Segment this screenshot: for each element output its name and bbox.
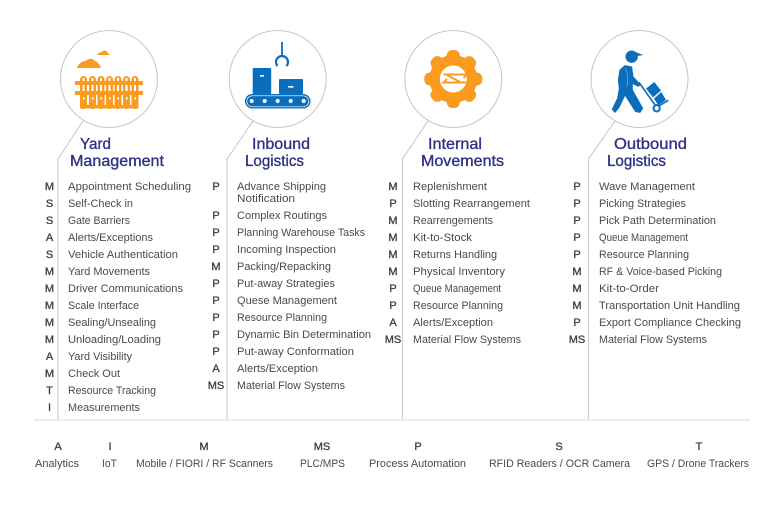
list: internal movements activities: Rearrengements: [413, 215, 493, 227]
legend: Analytics: [35, 458, 79, 470]
heading: inbound logistics: Inbound: [252, 136, 310, 153]
legend: M: [199, 441, 209, 453]
list: inbound logistics activities: Material Flow Systems: [237, 380, 345, 392]
list: internal movements activities: Queue Management: [413, 283, 501, 295]
list: inbound logistics activities: P: [212, 346, 220, 358]
legend: S: [555, 441, 563, 453]
list: inbound logistics activities: A: [212, 363, 220, 375]
list: outbound logistics activities: Transportation Unit Handling: [599, 300, 740, 312]
list: yard management activities: Resource Tracking: [68, 385, 156, 397]
list: yard management activities: M: [45, 283, 54, 295]
list: yard management activities: M: [45, 266, 54, 278]
heading: inbound logistics: Logistics: [245, 153, 304, 170]
list: internal movements activities: P: [389, 198, 397, 210]
list: outbound logistics activities: P: [573, 215, 581, 227]
list: internal movements activities: MS: [385, 334, 401, 346]
list: inbound logistics activities: P: [212, 295, 220, 307]
list: yard management activities: M: [45, 300, 54, 312]
list: yard management activities: I: [48, 402, 51, 414]
list: outbound logistics activities: Queue Management: [599, 232, 688, 244]
heading: yard management: Management: [70, 153, 165, 170]
list: inbound logistics activities: P: [212, 227, 220, 239]
list: yard management activities: Gate Barriers: [68, 215, 130, 227]
list: outbound logistics activities: [569, 181, 741, 346]
list: yard management activities: S: [46, 249, 53, 261]
heading: outbound logistics: Outbound: [614, 136, 687, 153]
list: yard management activities: M: [45, 334, 54, 346]
legend: PLC/MPS: [300, 458, 345, 470]
list: inbound logistics activities: Notification: [237, 193, 295, 205]
panel: internal movements: [385, 30, 530, 346]
list: yard management activities: M: [45, 368, 54, 380]
list: inbound logistics activities: Put-away Conformation: [237, 346, 354, 358]
legend: GPS / Drone Trackers: [647, 458, 749, 470]
list: yard management activities: Yard Movements: [68, 266, 150, 278]
list: internal movements activities: Replenishment: [413, 181, 487, 193]
list: internal movements activities: Returns Handling: [413, 249, 497, 261]
list: internal movements activities: Physical Inventory: [413, 266, 506, 278]
list: inbound logistics activities: P: [212, 278, 220, 290]
list: inbound logistics activities: Put-away Strategies: [237, 278, 335, 290]
list: inbound logistics activities: Resource Planning: [237, 312, 327, 324]
list: inbound logistics activities: Incoming Inspection: [237, 244, 336, 256]
list: yard management activities: M: [45, 181, 54, 193]
icon: worker with hand truck: [591, 30, 688, 128]
list: inbound logistics activities: P: [212, 210, 220, 222]
list: outbound logistics activities: P: [573, 232, 581, 244]
list: yard management activities: S: [46, 215, 53, 227]
list: internal movements activities: M: [388, 232, 398, 244]
list: inbound logistics activities: M: [211, 261, 221, 273]
legend: A: [54, 441, 62, 453]
list: outbound logistics activities: M: [572, 300, 582, 312]
list: yard management activities: Yard Visibility: [68, 351, 132, 363]
list: outbound logistics activities: Resource Planning: [599, 249, 689, 261]
list: outbound logistics activities: Wave Management: [599, 181, 695, 193]
list: outbound logistics activities: M: [572, 283, 582, 295]
list: yard management activities: Appointment Scheduling: [68, 181, 191, 193]
panel: outbound logistics: [569, 30, 741, 346]
legend: IoT: [102, 458, 117, 470]
list: internal movements activities: M: [388, 249, 398, 261]
list: internal movements activities: Slotting Rearrangement: [413, 198, 530, 210]
list: yard management activities: Measurements: [68, 402, 140, 414]
list: inbound logistics activities: MS: [208, 380, 224, 392]
list: yard management activities: A: [46, 351, 54, 363]
list: yard management activities: Unloading/Loading: [68, 334, 161, 346]
list: outbound logistics activities: P: [573, 181, 581, 193]
list: internal movements activities: Alerts/Exception: [413, 317, 493, 329]
list: yard management activities: Vehicle Authentication: [68, 249, 178, 261]
list: yard management activities: Alerts/Exceptions: [68, 232, 153, 244]
list: outbound logistics activities: Pick Path Determination: [599, 215, 716, 227]
list: internal movements activities: P: [389, 300, 397, 312]
list: outbound logistics activities: P: [573, 317, 581, 329]
list: inbound logistics activities: Packing/Repacking: [237, 261, 331, 273]
list: yard management activities: S: [46, 198, 53, 210]
legend: P: [414, 441, 422, 453]
list: outbound logistics activities: MS: [569, 334, 585, 346]
panel: yard management: [45, 30, 191, 414]
list: internal movements activities: M: [388, 266, 398, 278]
list: inbound logistics activities: Planning Warehouse Tasks: [237, 227, 365, 239]
list: internal movements activities: P: [389, 283, 397, 295]
heading: outbound logistics: Logistics: [607, 153, 666, 170]
list: internal movements activities: [385, 181, 530, 346]
list: outbound logistics activities: Material Flow Systems: [599, 334, 707, 346]
list: inbound logistics activities: Dynamic Bin Determination: [237, 329, 371, 341]
list: internal movements activities: M: [388, 181, 398, 193]
list: inbound logistics activities: P: [212, 181, 220, 193]
legend: RFID Readers / OCR Camera: [489, 458, 631, 470]
list: internal movements activities: A: [389, 317, 397, 329]
list: outbound logistics activities: P: [573, 249, 581, 261]
list: internal movements activities: M: [388, 215, 398, 227]
list: outbound logistics activities: Export Compliance Checking: [599, 317, 741, 329]
heading: internal movements: Movements: [421, 153, 504, 170]
list: inbound logistics activities: [208, 181, 371, 392]
icon: fence and clouds: [60, 30, 158, 128]
list: yard management activities: Sealing/Unsealing: [68, 317, 156, 329]
list: yard management activities: A: [46, 232, 54, 244]
icon: conveyor belt with claw: [229, 30, 326, 128]
list: inbound logistics activities: P: [212, 312, 220, 324]
list: yard management activities: Self-Check in: [68, 198, 133, 210]
legend: MS: [314, 441, 330, 453]
list: yard management activities: [45, 181, 191, 414]
list: inbound logistics activities: Alerts/Exception: [237, 363, 318, 375]
icon: gear: [405, 30, 502, 128]
list: inbound logistics activities: Advance Shipping: [237, 181, 326, 193]
list: yard management activities: Check Out: [68, 368, 120, 380]
list: yard management activities: Scale Interface: [68, 300, 139, 312]
legend: Mobile / FIORI / RF Scanners: [136, 458, 273, 470]
list: inbound logistics activities: P: [212, 244, 220, 256]
list: outbound logistics activities: M: [572, 266, 582, 278]
legend: Process Automation: [369, 458, 466, 470]
legend: T: [696, 441, 703, 453]
list: internal movements activities: Resource Planning: [413, 300, 503, 312]
panel: inbound logistics: [208, 30, 371, 392]
list: inbound logistics activities: P: [212, 329, 220, 341]
list: inbound logistics activities: Quese Management: [237, 295, 337, 307]
list: yard management activities: Driver Communications: [68, 283, 183, 295]
list: outbound logistics activities: Kit-to-Order: [599, 283, 659, 295]
list: yard management activities: M: [45, 317, 54, 329]
list: internal movements activities: Kit-to-Stock: [413, 232, 473, 244]
heading: internal movements: Internal: [428, 136, 482, 153]
heading: yard management: Yard: [80, 136, 111, 153]
list: outbound logistics activities: P: [573, 198, 581, 210]
list: outbound logistics activities: Picking Strategies: [599, 198, 686, 210]
list: yard management activities: T: [46, 385, 53, 397]
legend: [35, 441, 749, 470]
list: outbound logistics activities: RF & Voice-based Picking: [599, 266, 722, 278]
list: internal movements activities: Material Flow Systems: [413, 334, 521, 346]
list: inbound logistics activities: Complex Routings: [237, 210, 328, 222]
legend: I: [108, 441, 112, 453]
